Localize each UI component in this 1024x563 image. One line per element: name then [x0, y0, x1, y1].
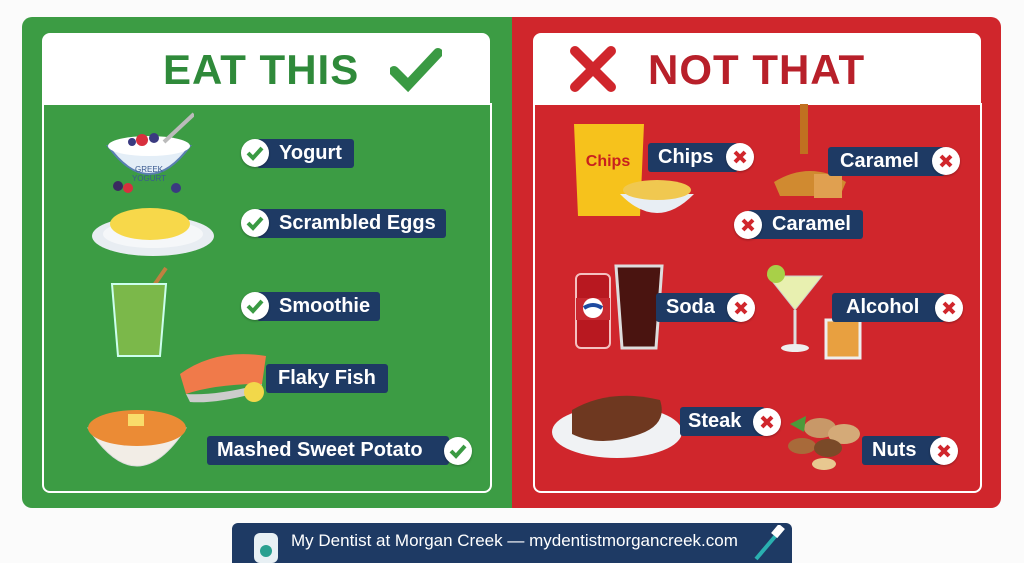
label: alcohol: Alcohol [846, 296, 919, 318]
label: flaky fish [266, 364, 388, 393]
label: scrambled eggs: Scrambled Eggs [279, 212, 436, 234]
label: caramel second [733, 210, 863, 241]
icon: big x [570, 46, 616, 92]
icon: sweet potato bowl [87, 410, 187, 466]
icon: scrambled eggs [92, 208, 214, 256]
icon: chips [574, 124, 694, 216]
label: caramel second: Caramel [772, 213, 851, 235]
label: soda: Soda [666, 296, 715, 318]
icon: check [241, 209, 269, 237]
label: steak: Steak [688, 410, 741, 432]
label: caramel top: Caramel [840, 150, 919, 172]
footer text: My Dentist at Morgan Creek — mydentistmorgancreek.com [291, 531, 738, 550]
icon: nuts [788, 416, 860, 470]
inner frame [533, 103, 982, 493]
icon: check [241, 292, 269, 320]
heading box: eat this [42, 33, 490, 105]
label: nuts: Nuts [872, 439, 916, 461]
icon: x [726, 143, 754, 171]
icon: smoothie [110, 267, 168, 357]
label: soda [656, 293, 756, 324]
label: caramel top [828, 147, 961, 177]
icon: check [241, 139, 269, 167]
label: alcohol [832, 293, 964, 324]
icon: x [930, 437, 958, 465]
icon: salmon [180, 354, 266, 402]
panel: not that [512, 17, 1001, 508]
icon: chips: Chips [586, 153, 630, 170]
icon: big check [390, 48, 442, 92]
label: smoothie: Smoothie [279, 295, 370, 317]
icon: x [727, 294, 755, 322]
footer bar [232, 523, 792, 563]
label: flaky fish: Flaky Fish [278, 367, 376, 389]
label: mashed sweet potato [207, 436, 473, 467]
icon: floss [254, 533, 278, 563]
label: mashed sweet potato: Mashed Sweet Potato [217, 439, 423, 461]
inner frame [42, 103, 492, 493]
label: chips [648, 143, 755, 173]
label: smoothie [240, 292, 380, 322]
icon: caramel [774, 104, 846, 198]
label: nuts [862, 436, 959, 467]
icon: x [753, 408, 781, 436]
label: chips: Chips [658, 146, 714, 168]
heading box: not that [533, 33, 981, 105]
icon: check [444, 437, 472, 465]
icon: cocktail [767, 265, 862, 360]
icon: steak [552, 396, 682, 458]
icon: x [932, 147, 960, 175]
icon: yogurt bowl: YOGURT [132, 174, 166, 183]
icon: toothbrush [754, 525, 785, 560]
label: yogurt [240, 139, 354, 169]
panel: eat this [22, 17, 514, 508]
heading text: EAT THIS [163, 46, 359, 93]
heading text: NOT THAT [648, 46, 865, 93]
icon: yogurt bowl: GREEK [135, 165, 164, 174]
label: steak [680, 407, 782, 438]
label: yogurt: Yogurt [279, 142, 342, 164]
icon: x [935, 294, 963, 322]
label: scrambled eggs [240, 209, 446, 239]
icon: x [734, 211, 762, 239]
icon: soda [575, 264, 664, 350]
icon: yogurt bowl [106, 112, 194, 193]
